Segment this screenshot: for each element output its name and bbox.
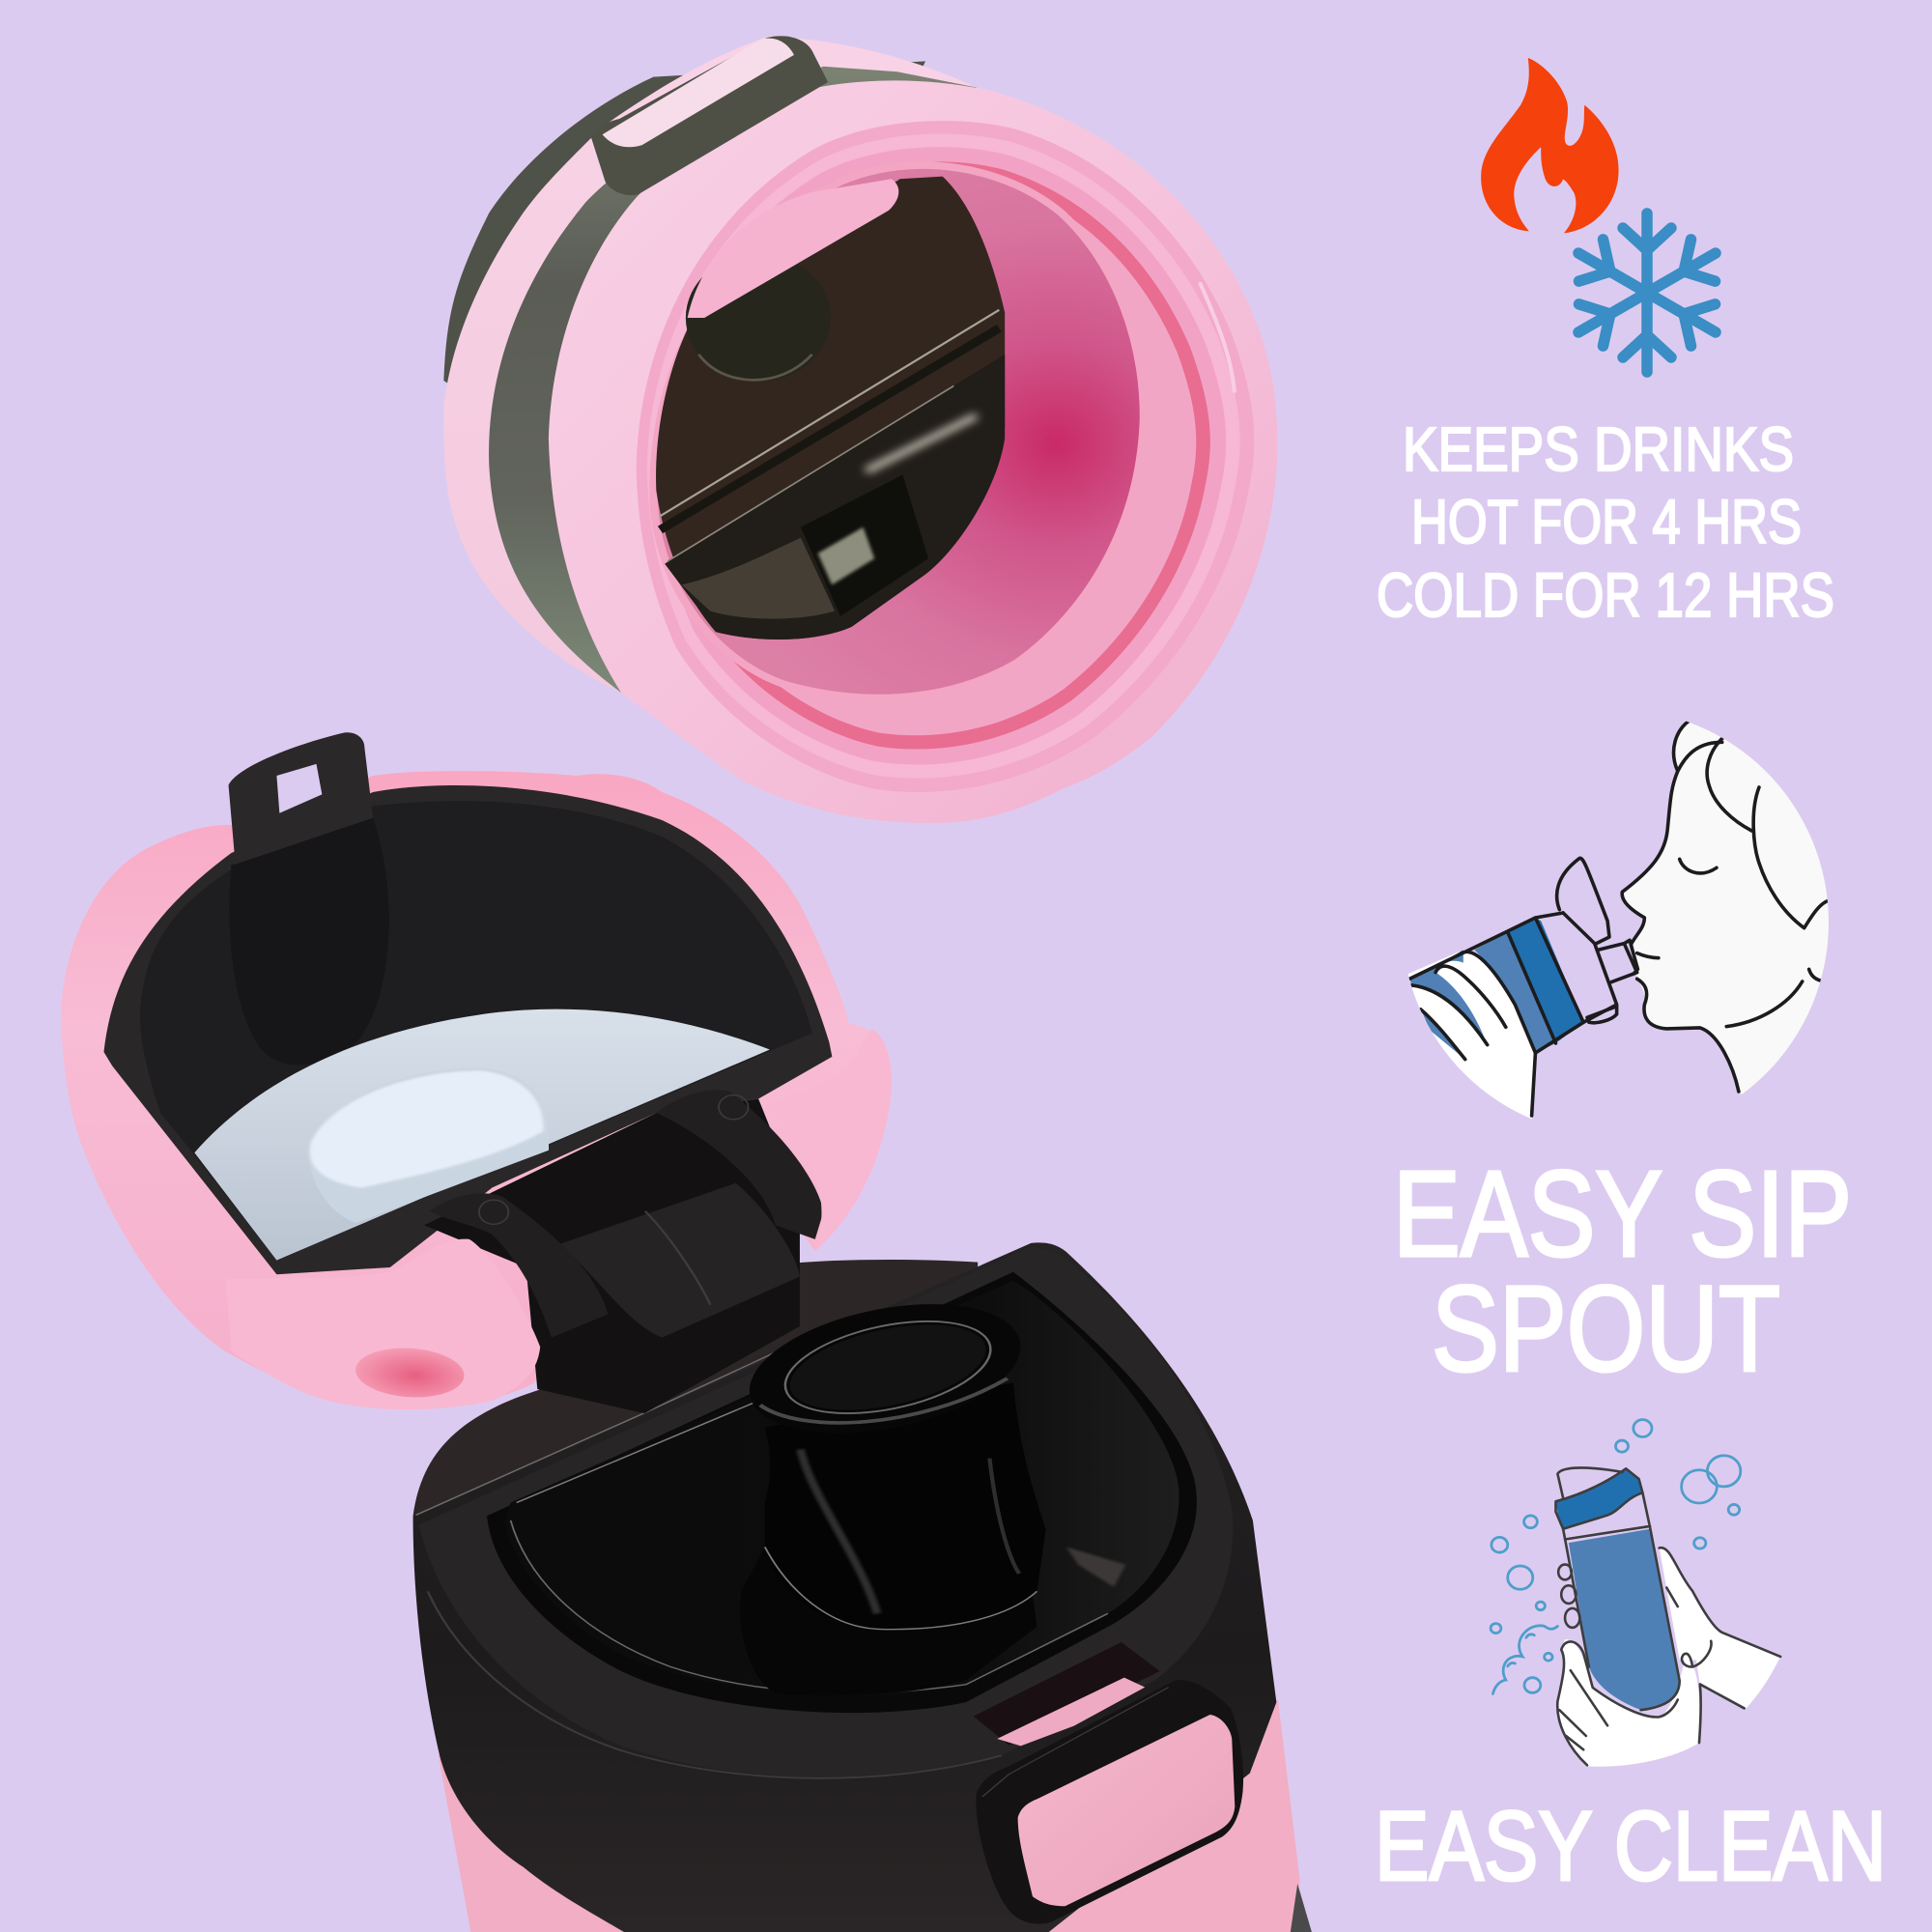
hands <box>1660 1548 1780 1708</box>
push button in housing <box>974 1642 1243 1924</box>
spout neck <box>740 1383 1046 1695</box>
outlines <box>1555 1467 1780 1765</box>
text: keeps drinks hot and cold: KEEPS DRINKS <box>1403 414 1794 484</box>
pink slider <box>997 1678 1145 1746</box>
clasp <box>591 36 828 195</box>
open flip lid <box>61 732 892 1413</box>
reflection <box>1066 1547 1125 1587</box>
icon: snowflake <box>1566 213 1728 372</box>
tab shadow <box>229 818 389 1065</box>
text: easy sip spout: EASY SIP <box>1393 1146 1852 1282</box>
cap inner wall <box>653 165 1144 698</box>
hinge block <box>424 1090 824 1413</box>
text: keeps drinks hot and cold: HOT FOR 4 HRS <box>1411 487 1802 556</box>
hand <box>1408 950 1534 1119</box>
spout rim <box>727 1281 1042 1457</box>
lid pink shell <box>61 771 892 1409</box>
drawn lines <box>1409 720 1828 1116</box>
icon: person sipping from bottle <box>1389 715 1840 1121</box>
cap inner dark panel <box>656 177 1005 639</box>
cap throat thread rings <box>637 121 1254 792</box>
cap dark band <box>489 67 977 693</box>
lid interior <box>140 801 812 1261</box>
cap back ring <box>443 36 977 693</box>
cap pink flap <box>688 179 898 318</box>
bottle <box>1569 1529 1680 1710</box>
cap front ring <box>549 80 1277 823</box>
removed cap, underside view <box>443 36 1277 823</box>
black collar and top plate <box>413 1242 1276 1932</box>
bottle pink body <box>439 1700 1312 1932</box>
lid rim <box>103 785 832 1274</box>
text: keeps drinks hot and cold <box>1377 414 1834 630</box>
icon: flame <box>1481 58 1619 233</box>
bubbles <box>1491 1420 1741 1693</box>
slider gap <box>974 1642 1160 1746</box>
icon: hands washing bottle with bubbles <box>1491 1420 1780 1767</box>
bottle bands <box>1508 918 1583 1043</box>
silicone seal <box>194 1009 770 1261</box>
face <box>1624 721 1829 1094</box>
glossy recess <box>487 1272 1197 1713</box>
text: easy sip spout: SPOUT <box>1432 1261 1780 1397</box>
bottle with open spout <box>413 1242 1312 1932</box>
cap dark shell <box>443 61 925 439</box>
lid front pink lobes <box>226 1029 892 1409</box>
lid tab with hole <box>229 732 373 865</box>
text: easy sip spout <box>1393 1146 1852 1397</box>
text: keeps drinks hot and cold: COLD FOR 12 HRS <box>1377 560 1834 630</box>
